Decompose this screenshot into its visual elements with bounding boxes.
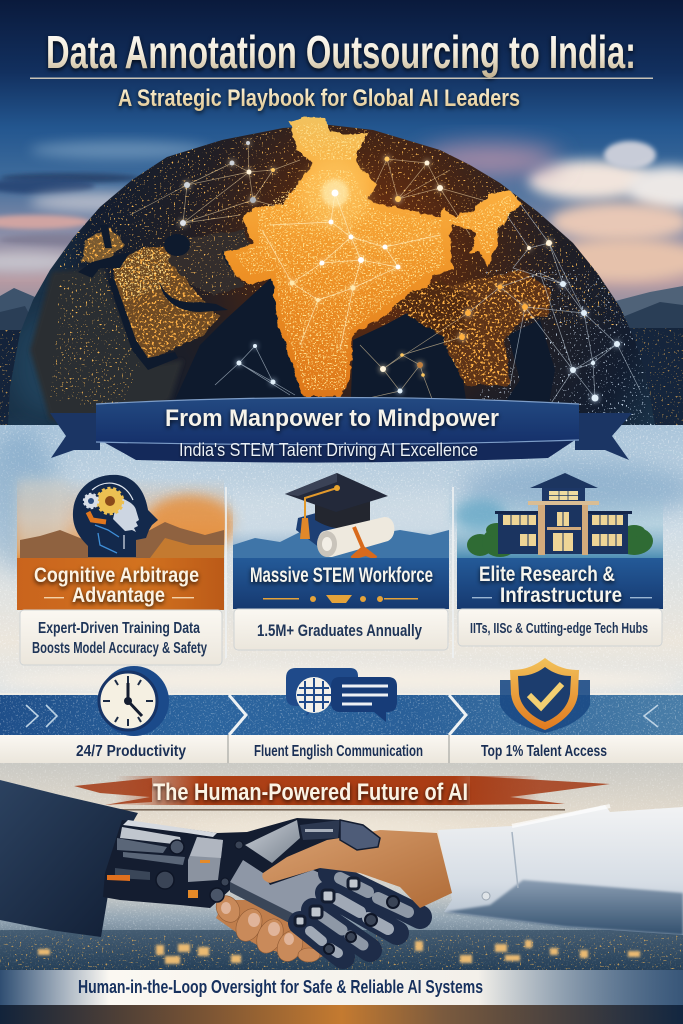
title band [17,558,224,610]
card dividers [226,487,453,658]
label: english: Fluent English Communication [254,743,423,760]
background sky [0,0,683,425]
right shirt sleeve [438,805,683,935]
robot fingers [300,873,420,957]
panel: elite research and infrastructure: Infrastructure [500,584,622,607]
caption text: Human-in-the-Loop Oversight for Safe & Reliable AI Systems [78,977,483,997]
card image background [17,478,235,558]
seas [78,226,555,402]
india map glowing [223,117,522,397]
bottom glow strip [0,1005,683,1024]
land: mediterranean coast [82,228,125,262]
robot hand and arm [103,818,420,957]
icon: shield [500,658,590,733]
background city lights [0,930,683,970]
subtitle: A Strategic Playbook for Global AI Leaders [118,85,520,112]
title rule [30,78,653,79]
land: africa [30,268,183,425]
icon: graduation cap and diploma [285,473,394,558]
ribbon lower band [100,438,578,463]
heading banner: human-powered future [74,776,610,811]
diploma [318,517,394,557]
panel: cognitive arbitrage: Advantage [72,584,165,607]
caption strip [0,970,683,1005]
icon: clock [99,666,169,736]
clouds [0,141,683,282]
icon: chat bubbles [286,668,397,722]
network nodes on india [262,190,440,350]
ornament [263,595,418,603]
land: southeast asia lights [430,270,552,385]
card body [458,609,662,646]
human hand lower fingers [211,891,335,966]
ribbon banner [50,398,632,463]
card image background [454,490,663,558]
icon: head with gears [73,475,158,557]
globe [8,125,660,425]
ribbon tails [50,413,100,458]
card heading: Cognitive Arbitrage [34,564,199,587]
panel: cognitive arbitrage [17,475,235,665]
card text: 1.5M+ Graduates Annually [257,621,422,640]
label: talent: Top 1% Talent Access [481,743,607,760]
middle section background [0,425,683,775]
panel: elite research and infrastructure [454,473,663,646]
ribbon subheading: India's STEM Talent Driving AI Excellence [179,440,478,460]
robot palm [230,860,335,917]
icon: trees [467,523,653,557]
human hand and thumb [262,830,452,908]
left suit sleeve [0,780,138,937]
land: arabia [113,247,220,360]
title band [457,558,663,609]
panel: cognitive arbitrage: Boosts Model Accuracy & Safety [32,640,207,657]
network lines pale [215,190,640,420]
icon: campus building [495,473,632,555]
lower section background [0,763,683,970]
card body [234,609,448,650]
arrow chevrons [229,695,466,735]
title band [233,558,449,609]
distant mountains and city [0,286,683,426]
benefits arrow band [0,693,683,735]
card heading: Elite Research & [479,563,615,586]
benefit label strip [0,735,683,763]
land: iran and central asia [170,230,256,295]
network lines warm [130,145,485,398]
ribbon main band [96,398,579,445]
globe network nodes [180,141,620,402]
ribbon heading: From Manpower to Mindpower [165,405,499,432]
card body [20,610,222,665]
label: productivity: 24/7 Productivity [76,743,186,760]
card text: Expert-Driven Training Data [38,620,200,637]
scattered lights [60,125,370,295]
card heading: Massive STEM Workforce [250,564,433,587]
robot upper plate [245,820,300,863]
panel: massive stem workforce [233,473,449,650]
card image background [233,485,449,558]
heading text: The Human-Powered Future of AI [153,779,468,806]
robot thumb [340,820,380,850]
